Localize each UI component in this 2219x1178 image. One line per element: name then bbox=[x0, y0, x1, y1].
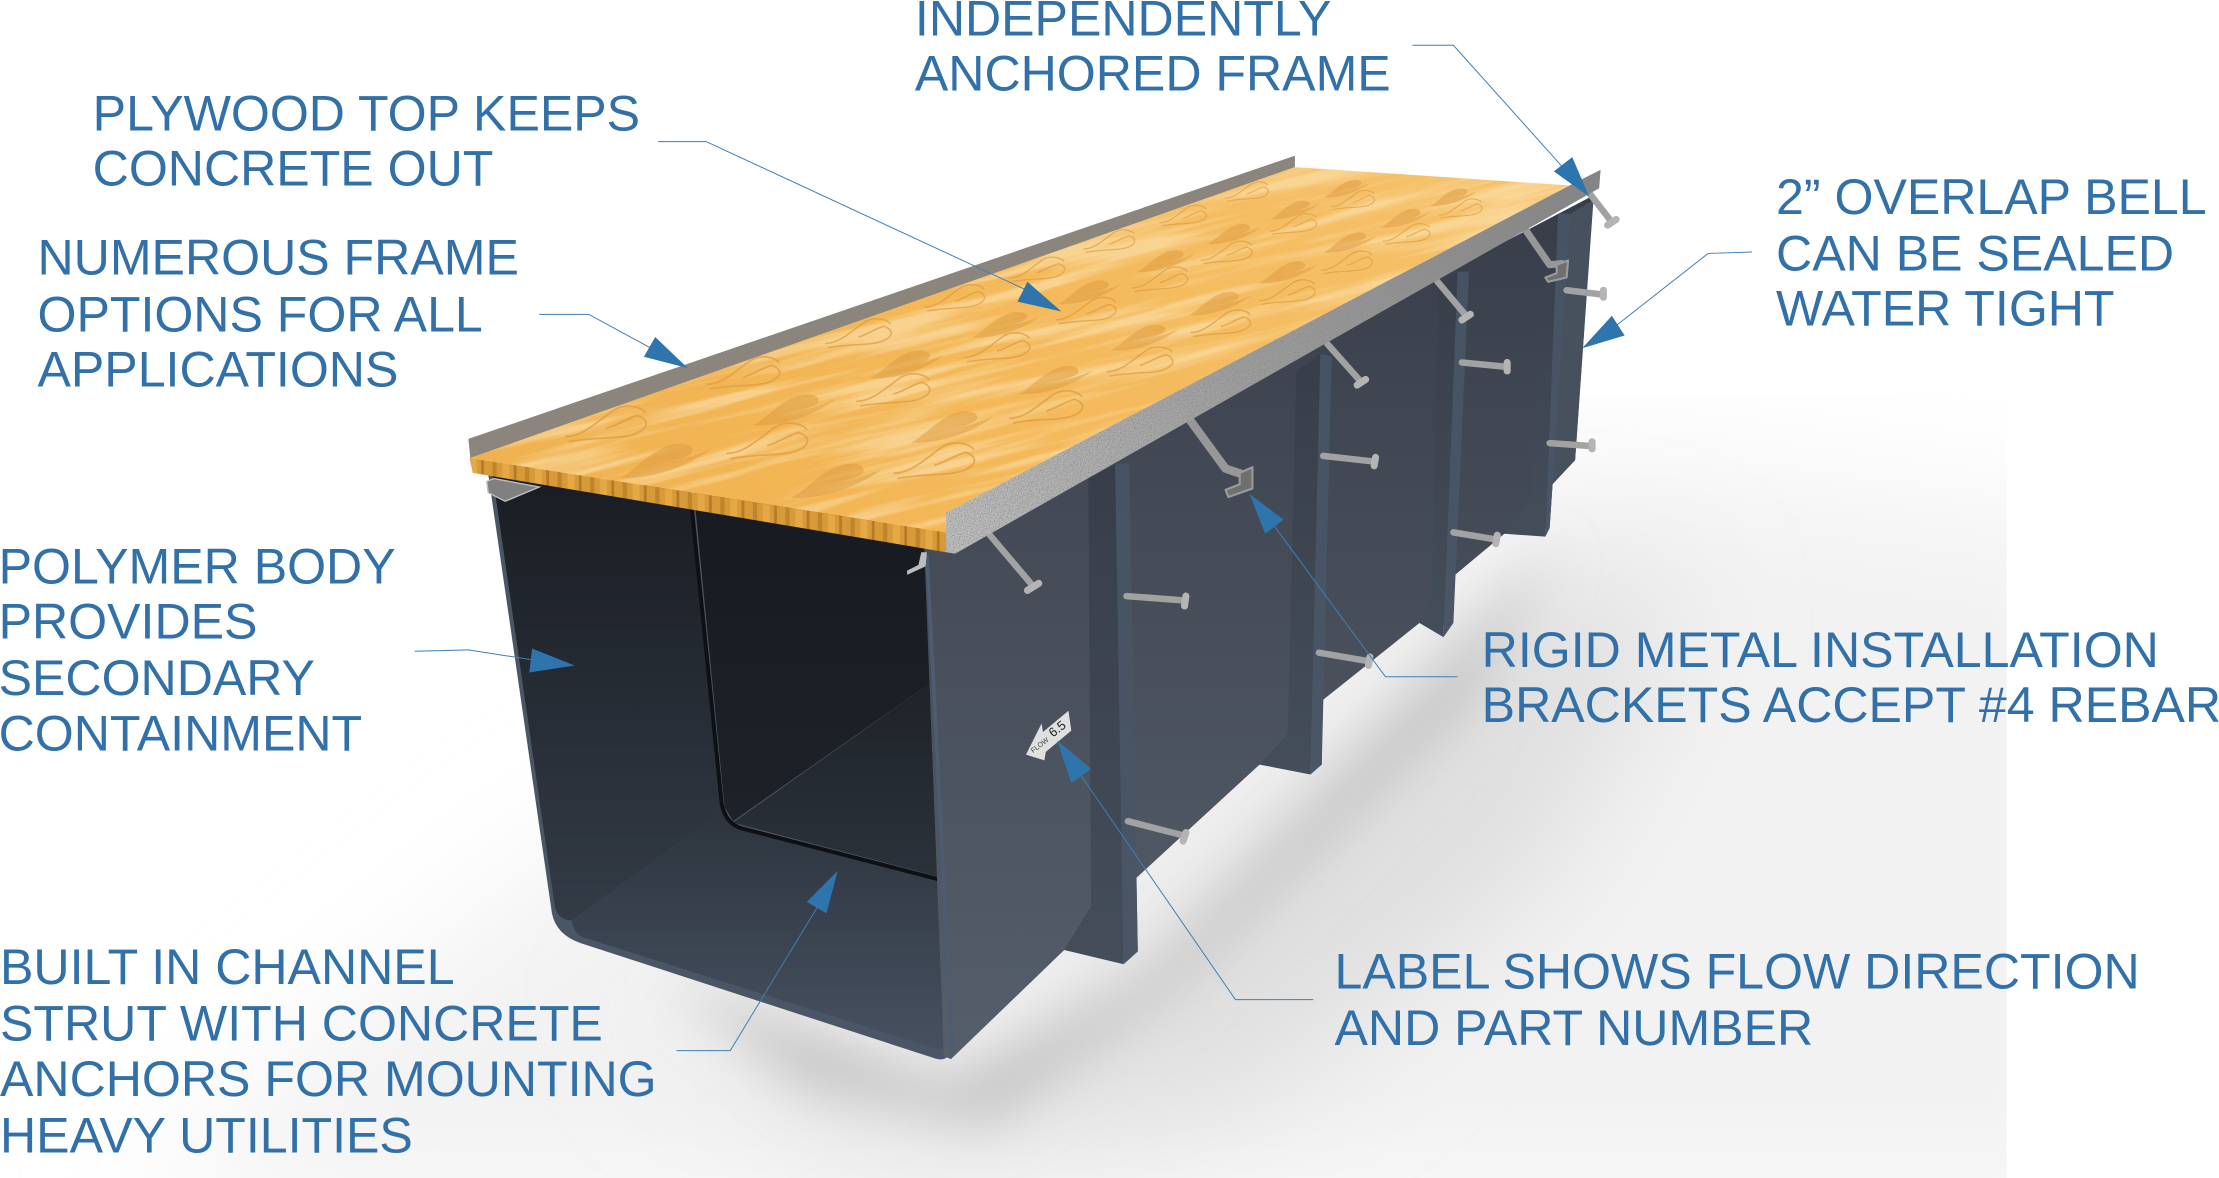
metal installation brackets bbox=[1183, 224, 1568, 497]
callout: polymer body: SECONDARY bbox=[0, 650, 315, 706]
callout: polymer body: CONTAINMENT bbox=[0, 705, 362, 761]
callout: polymer body: POLYMER BODY bbox=[0, 538, 396, 594]
callout: overlap bell: 2” OVERLAP BELL bbox=[1776, 169, 2207, 225]
frame clips bbox=[487, 479, 927, 575]
callout: frame options: APPLICATIONS bbox=[38, 342, 398, 398]
callout: plywood top bbox=[93, 85, 1061, 311]
callout: plywood top: PLYWOOD TOP KEEPS bbox=[93, 85, 640, 141]
callout: polymer body: PROVIDES bbox=[0, 594, 257, 650]
callout: plywood top: CONCRETE OUT bbox=[93, 140, 493, 196]
callout: overlap bell: WATER TIGHT bbox=[1776, 281, 2115, 337]
polymer body interior bbox=[488, 474, 951, 1059]
callout: overlap bell: CAN BE SEALED bbox=[1776, 225, 2174, 281]
galvanized frame strip bbox=[946, 170, 1601, 554]
rib 2 bbox=[1260, 354, 1332, 774]
callout: overlap bell bbox=[1582, 169, 2207, 348]
callout: frame options: OPTIONS FOR ALL bbox=[38, 286, 483, 342]
plywood top bbox=[470, 167, 1570, 552]
plywood surface bbox=[470, 167, 1570, 532]
flow direction label bbox=[1026, 711, 1071, 760]
callout: rigid metal brackets: BRACKETS ACCEPT #4 REBAR bbox=[1482, 677, 2219, 733]
callout: channel strut: BUILT IN CHANNEL bbox=[0, 939, 455, 995]
plywood front edge bbox=[470, 458, 946, 552]
rebar anchors bbox=[986, 191, 1616, 841]
floor shadow bbox=[270, 472, 2006, 1178]
callout: channel strut bbox=[0, 871, 838, 1164]
callout: channel strut: STRUT WITH CONCRETE bbox=[0, 996, 603, 1052]
callout: frame options: NUMEROUS FRAME bbox=[38, 230, 519, 286]
callout: frame options bbox=[38, 230, 688, 398]
flow direction label: 6.5 bbox=[1046, 717, 1069, 740]
flow direction label: FLOW bbox=[1030, 737, 1051, 755]
rib 1 bbox=[1064, 463, 1138, 964]
callout: flow label bbox=[1057, 740, 2140, 1056]
callout: flow label: LABEL SHOWS FLOW DIRECTION bbox=[1335, 943, 2140, 999]
callout: rigid metal brackets: RIGID METAL INSTALLATION bbox=[1482, 622, 2159, 678]
callout: flow label: AND PART NUMBER bbox=[1335, 1000, 1813, 1056]
rib 4 and bell bbox=[1504, 200, 1593, 537]
rib 3 bbox=[1419, 272, 1469, 637]
polymer body exterior wall bbox=[924, 195, 1593, 1059]
callout: polymer body bbox=[0, 538, 575, 761]
callout: independently anchored frame bbox=[915, 0, 1589, 197]
callout: independently anchored frame: ANCHORED FRAME bbox=[915, 46, 1391, 102]
callout: channel strut: ANCHORS FOR MOUNTING bbox=[0, 1051, 657, 1107]
trench drain product bbox=[468, 156, 1620, 1060]
callout: rigid metal brackets bbox=[1250, 494, 2219, 733]
back rail of frame bbox=[468, 156, 1295, 467]
callout: channel strut: HEAVY UTILITIES bbox=[0, 1108, 413, 1164]
